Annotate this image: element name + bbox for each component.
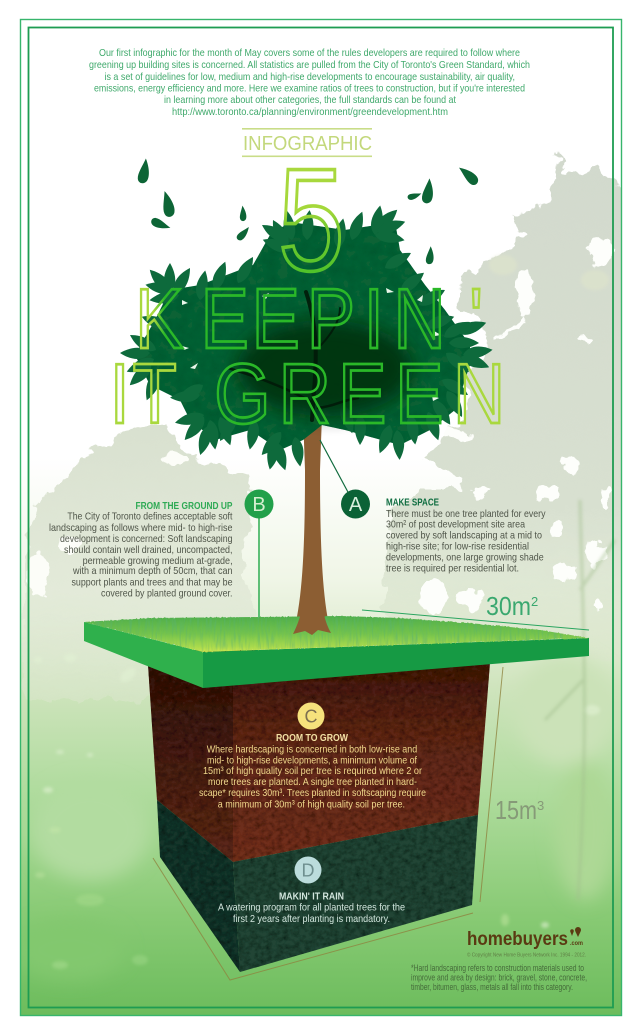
canopy shadow centre: [237, 320, 413, 416]
intro paragraph: is a set of guidelines for low, medium and high-rise developments to encourage sustainability, air quality,: [104, 71, 515, 83]
slab sides: [84, 622, 203, 688]
text D: first 2 years after planting is mandatory.: [233, 913, 390, 925]
title line one: KEEPIN': [135, 271, 483, 366]
text B: The City of Toronto defines acceptable soft: [67, 510, 232, 522]
text D: A watering program for all planted trees for the: [218, 902, 405, 914]
text B: should contain well drained, uncompacted,: [64, 544, 232, 556]
text C: [199, 732, 426, 810]
text B: permeable growing medium at-grade,: [83, 555, 233, 567]
text B: FROM THE GROUND UP: [136, 500, 232, 512]
text D: [218, 890, 405, 925]
dark soil layer: [157, 800, 478, 972]
homebuyers logo: homebuyers: [467, 929, 568, 950]
text C: Where hardscaping is concerned in both low-rise and: [207, 744, 417, 756]
text B: [49, 500, 233, 600]
text C: 15m³ of high quality soil per tree is required where 2 or: [203, 765, 422, 777]
text A: 30m² of post development site area: [386, 519, 525, 531]
text A: MAKE SPACE: [386, 496, 439, 508]
marker D: D: [302, 860, 314, 880]
text B: with a minimum depth of 50cm, that can: [72, 565, 233, 577]
30m2 dimension: 30m: [486, 591, 531, 621]
marker A: A: [349, 494, 363, 516]
text C: a minimum of 30m³ of high quality soil per tree.: [218, 798, 405, 810]
faded tree cluster left: [24, 420, 260, 700]
callout B: [49, 490, 274, 621]
15m3 dimension: 15m: [495, 795, 537, 825]
callout A: [320, 440, 546, 574]
title line two: IT GREEN: [110, 346, 505, 441]
callout D: [218, 856, 405, 925]
marker B: [244, 490, 274, 621]
homebuyers logo: .com: [570, 940, 583, 947]
text C: more trees are planted. A single tree planted in hard-: [208, 776, 417, 788]
marker D: [294, 856, 322, 884]
text A: high-rise site; for low-rise residential: [386, 541, 529, 553]
text B: development is concerned: Soft landscaping: [60, 533, 233, 545]
canopy leaves: [120, 204, 493, 472]
holes in right tree: [420, 238, 612, 613]
grass top: [84, 616, 589, 652]
intro paragraph: Our first infographic for the month of May covers some of the rules developers are required to follow where: [99, 47, 520, 59]
text B: support plants and trees and that may be: [72, 576, 233, 588]
intro paragraph: in learning more about other categories, the full standards can be found at: [164, 94, 456, 106]
lower foliage mottling: [15, 655, 615, 980]
faded background trees: [15, 150, 630, 980]
canopy body: [135, 222, 470, 450]
number 5: 5: [278, 139, 345, 302]
marker B: B: [252, 494, 266, 516]
faint tree trunk right: [545, 500, 615, 900]
holes in left tree: [27, 454, 189, 597]
callout C: [199, 702, 426, 810]
text A: developments, one large growing shade: [386, 551, 544, 563]
footnote: [411, 963, 587, 993]
tree: [120, 204, 493, 635]
marker C: [298, 702, 324, 730]
intro paragraph: http://www.toronto.ca/planning/environment/greendevelopment.htm: [172, 106, 448, 118]
trunk base over grass: [293, 590, 331, 635]
dimension lines: [153, 667, 503, 980]
grass slab: [84, 590, 589, 688]
text B: landscaping as follows where mid- to high-rise: [49, 522, 233, 534]
speckled light leaves: [36, 705, 600, 970]
canopy highlights: [182, 288, 441, 401]
footnote: timber, bitumen, glass, metals all fall into this category.: [411, 982, 573, 993]
intro paragraph: emissions, energy efficiency and more. Here we examine ratios of trees to construction, but if you're interested: [94, 82, 525, 94]
text A: tree is required per residential lot.: [386, 562, 519, 574]
30m2 dimension: [362, 591, 589, 630]
text D: MAKIN' IT RAIN: [279, 890, 344, 902]
text C: ROOM TO GROW: [276, 732, 348, 744]
light patches in right tree: [490, 254, 500, 260]
marker A: [320, 440, 370, 518]
branches: [228, 292, 358, 420]
text A: [386, 496, 546, 574]
icon: map pins: [570, 927, 581, 937]
infographic label: INFOGRAPHIC: [243, 132, 372, 155]
falling leaves: [137, 158, 481, 264]
text A: covered by soft landscaping at a mid to: [386, 530, 542, 542]
red soil layer: [147, 650, 491, 862]
intro paragraph: greening up building sites is concerned. All statistics are pulled from the City of Toronto's Green Standard, which: [89, 59, 530, 71]
30m2 dimension: 2: [531, 594, 538, 609]
trunk: [293, 415, 331, 635]
homebuyers logo: © Copyright New Home Buyers Network Inc. 1994 - 2012.: [467, 952, 586, 958]
text A: There must be one tree planted for every: [386, 508, 546, 520]
text C: scape* requires 30m³. Trees planted in softscaping require: [199, 787, 426, 799]
homebuyers logo: [467, 927, 586, 958]
marker C: C: [304, 706, 318, 726]
15m3 dimension: 3: [537, 798, 544, 813]
text C: mid- to high-rise developments, a minimum volume of: [207, 754, 417, 766]
intro paragraph: [89, 47, 530, 118]
text B: covered by planted ground cover.: [101, 588, 232, 600]
soil block: [147, 650, 503, 980]
faded maple tree right: [385, 150, 630, 660]
